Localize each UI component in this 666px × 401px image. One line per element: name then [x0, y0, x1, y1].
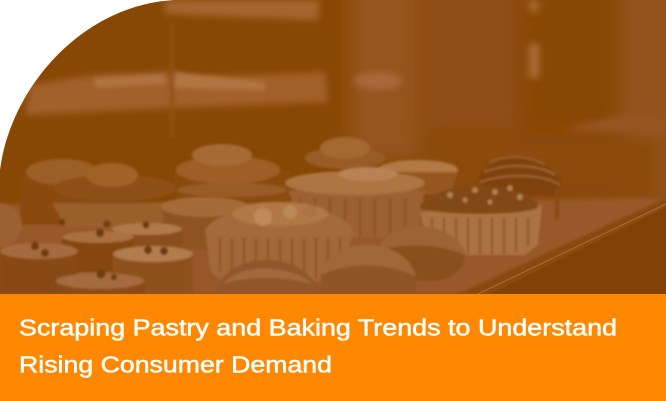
title text: [19, 314, 617, 378]
centre muffin: [285, 167, 425, 238]
round muffins and tiny cakes: [0, 197, 249, 294]
title band: [0, 294, 666, 401]
title text: Scraping Pastry and Baking Trends to Understand: [19, 314, 617, 340]
counter surface: [0, 198, 666, 294]
blurred back shelves: [25, 0, 328, 115]
background wall: [0, 0, 666, 294]
dark chocolate cupcake: [478, 157, 562, 220]
large front muffin: [205, 202, 353, 282]
frosted cupcakes, rear row: [20, 137, 458, 228]
hero photo: bakery display case with orange duotone: [0, 0, 666, 294]
dark counter edge: [490, 207, 666, 294]
blurred right background: [350, 0, 666, 200]
shelf highlights: [94, 69, 266, 106]
right muffin in paper wrapper: [420, 185, 542, 255]
title text: Rising Consumer Demand: [19, 352, 332, 378]
front round muffins: [216, 226, 465, 294]
